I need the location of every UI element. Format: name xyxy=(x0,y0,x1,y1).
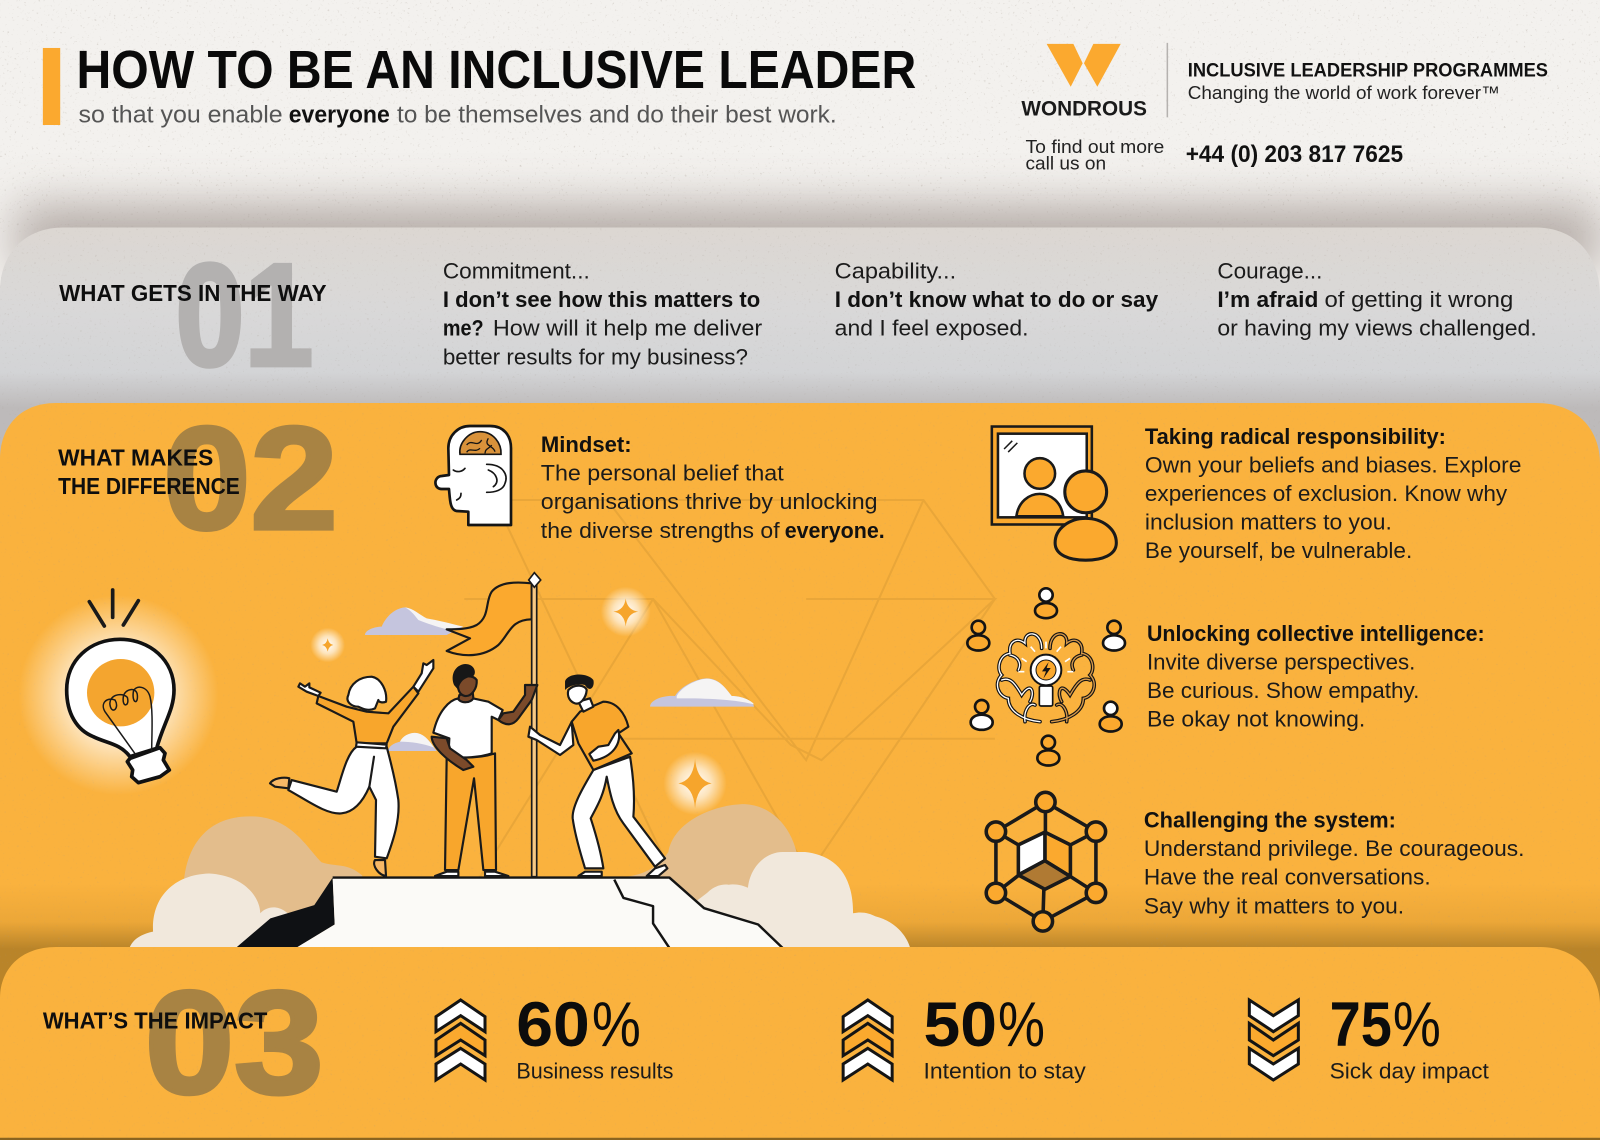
icon: brain surrounded by people xyxy=(967,588,1125,766)
heading: what gets in the way: WHAT GETS IN THE WAY xyxy=(59,280,327,306)
text: challenging the system: Challenging the system: xyxy=(1144,808,1396,833)
text: challenging the system: Have the real conversations. xyxy=(1144,865,1431,890)
stat: 60% business results xyxy=(436,990,673,1084)
stat: 75% sick day impact: % xyxy=(1393,990,1441,1060)
text: commitment: I don’t see how this matters to xyxy=(443,287,760,312)
text: unlocking collective intelligence: Invite diverse perspectives. xyxy=(1147,649,1415,674)
text: courage: Courage... xyxy=(1217,259,1322,284)
text: challenging the system xyxy=(1144,808,1524,918)
text: challenging the system: Say why it matters to you. xyxy=(1144,893,1404,918)
number 01: 01 xyxy=(176,233,313,396)
contact details: +44 (0) 203 817 7625 xyxy=(1186,141,1403,168)
text: courage: I’m afraid xyxy=(1217,287,1318,312)
text: commitment: better results for my business? xyxy=(443,344,748,369)
text: taking radical responsibility xyxy=(1145,424,1521,563)
stat: 50% intention to stay: Intention to stay xyxy=(923,1059,1087,1084)
contact details xyxy=(1026,136,1403,173)
stat: 75% sick day impact xyxy=(1249,990,1490,1084)
text: courage: or having my views challenged. xyxy=(1217,316,1537,341)
background clouds xyxy=(130,804,910,948)
text: unlocking collective intelligence: Unlocking collective intelligence: xyxy=(1147,621,1485,646)
figure: woman xyxy=(270,660,433,876)
number 02: 02 xyxy=(163,397,338,560)
illustration: three people raising a flag xyxy=(270,573,754,877)
flag and pole xyxy=(447,573,541,877)
text: capability: and I feel exposed. xyxy=(835,316,1029,341)
text: mindset: the diverse strengths of xyxy=(541,518,780,543)
heading: what makes the difference: THE DIFFERENCE xyxy=(58,473,240,499)
paper texture xyxy=(0,0,1600,235)
text: commitment: Commitment... xyxy=(443,259,590,284)
logo: Wondrous: WONDROUS xyxy=(1021,96,1147,120)
text: capability: I don’t know what to do or say xyxy=(835,287,1159,312)
subtitle: so that you enable xyxy=(79,101,283,128)
clouds xyxy=(365,607,754,751)
panel shadow xyxy=(15,207,1600,268)
text: taking radical responsibility: Own your beliefs and biases. Explore xyxy=(1145,452,1521,477)
panel 01: what gets in the way xyxy=(0,228,1600,490)
text: commitment xyxy=(443,259,763,369)
stat: 60% business results: % xyxy=(592,990,641,1060)
contact details: To find out more xyxy=(1026,136,1164,157)
stat: 60% business results: Business results xyxy=(516,1059,673,1084)
stat: 75% sick day impact: 75 xyxy=(1330,990,1392,1060)
stat: 50% intention to stay: % xyxy=(998,990,1045,1060)
sparkles xyxy=(310,587,727,815)
text: commitment: How will it help me deliver xyxy=(493,316,763,341)
contact details: call us on xyxy=(1026,152,1106,173)
text: challenging the system: Understand privilege. Be courageous. xyxy=(1144,836,1524,861)
programme text xyxy=(1167,43,1548,117)
stat: 50% intention to stay xyxy=(843,990,1087,1084)
header accent bar xyxy=(43,48,60,125)
panel 02: what makes the difference xyxy=(0,397,1600,1020)
text: capability xyxy=(835,259,1159,341)
programme text: INCLUSIVE LEADERSHIP PROGRAMMES xyxy=(1188,60,1548,82)
text: commitment: me? xyxy=(443,316,484,341)
figure: central man xyxy=(432,664,537,876)
text: mindset: Mindset: xyxy=(541,432,632,457)
icon: light bulb xyxy=(18,590,218,795)
text: mindset xyxy=(541,432,885,543)
text: mindset: organisations thrive by unlocking xyxy=(541,489,878,514)
text: capability: Capability... xyxy=(835,259,956,284)
heading: what's the impact: WHAT’S THE IMPACT xyxy=(43,1008,268,1034)
text: courage: of getting it wrong xyxy=(1324,287,1513,312)
stat: 50% intention to stay: 50 xyxy=(923,990,997,1060)
number 03: 03 xyxy=(145,961,323,1124)
stat: 75% sick day impact: Sick day impact xyxy=(1330,1059,1490,1084)
heading: what makes the difference: WHAT MAKES xyxy=(58,444,213,470)
background W pattern xyxy=(464,500,995,878)
text: unlocking collective intelligence: Be okay not knowing. xyxy=(1147,707,1365,732)
text: unlocking collective intelligence xyxy=(1147,621,1485,732)
icon: person and mirror xyxy=(992,427,1116,560)
text: mindset: The personal belief that xyxy=(541,461,784,486)
mountain peak xyxy=(236,878,783,948)
text: taking radical responsibility: experiences of exclusion. Know why xyxy=(1145,481,1508,506)
title: HOW TO BE AN INCLUSIVE LEADER xyxy=(77,40,916,100)
logo: Wondrous xyxy=(1021,44,1147,120)
figure: man on the right xyxy=(528,675,667,876)
programme text: Changing the world of work forever™ xyxy=(1188,82,1500,103)
icon: hexagon network with cube xyxy=(986,792,1106,931)
text: mindset: everyone. xyxy=(785,518,885,543)
icon: head with brain xyxy=(435,426,511,525)
panel 03: what's the impact xyxy=(0,947,1600,1140)
heading: what makes the difference xyxy=(58,444,240,499)
text: unlocking collective intelligence: Be curious. Show empathy. xyxy=(1147,678,1419,703)
text: taking radical responsibility: Taking radical responsibility: xyxy=(1145,424,1446,449)
subtitle xyxy=(79,101,837,128)
text: courage xyxy=(1217,259,1537,341)
subtitle: everyone xyxy=(289,101,390,128)
text: taking radical responsibility: Be yourself, be vulnerable. xyxy=(1145,538,1412,563)
text: taking radical responsibility: inclusion matters to you. xyxy=(1145,510,1392,535)
stat: 60% business results: 60 xyxy=(516,990,590,1060)
subtitle: to be themselves and do their best work. xyxy=(397,101,837,128)
